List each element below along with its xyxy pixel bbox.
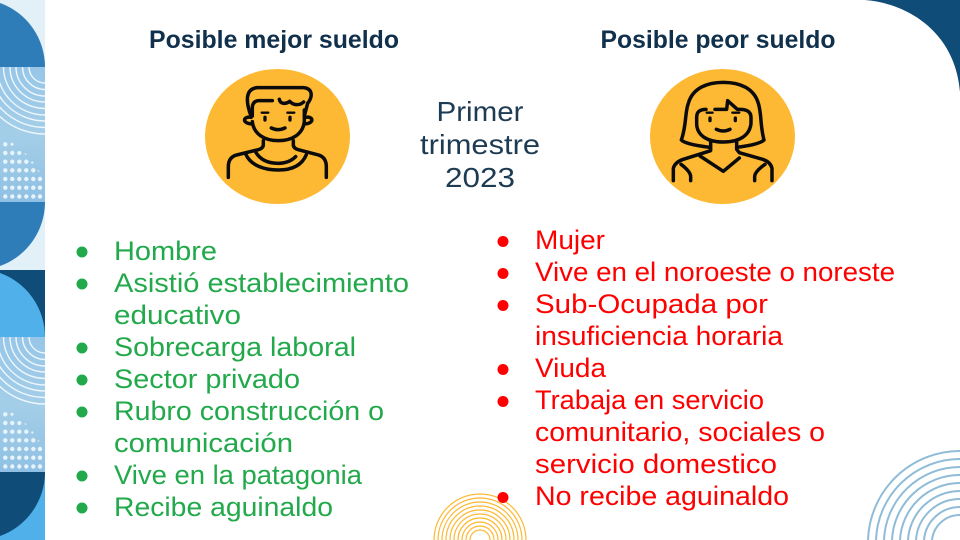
list: best salary traits: comunicación [114,428,293,458]
list: best salary traits: Sobrecarga laboral [114,332,356,362]
center title: period: 2023 [445,162,515,193]
panel: left decorative strip [0,0,112,540]
list: worst salary traits: Mujer [535,225,605,255]
list: best salary traits: Vive en la patagonia [114,460,363,490]
list: best salary traits: Sector privado [114,364,300,394]
list: worst salary traits: Vive en el noroeste o noreste [535,257,895,287]
center title: period: trimestre [420,129,540,160]
list: worst salary traits: Trabaja en servicio [535,385,764,415]
icon: woman avatar [650,69,795,204]
center title: period: Primer [436,96,524,127]
decorative corner: top right navy arc [865,0,960,92]
list: worst salary traits: comunitario, sociales o [535,417,825,447]
center title: period [420,96,540,193]
list: best salary traits: Rubro construcción o [114,396,384,426]
list: best salary traits [76,236,409,522]
decorative rings: bottom center [434,494,526,540]
list: worst salary traits: servicio domestico [535,449,777,479]
list: worst salary traits: No recibe aguinaldo [535,481,789,511]
list: best salary traits: Hombre [114,236,217,266]
decorative rings: bottom right [868,451,960,540]
icon: man avatar [205,69,350,204]
list: worst salary traits [498,225,895,511]
list: best salary traits: Recibe aguinaldo [114,492,333,522]
list: worst salary traits: Viuda [535,353,607,383]
heading: best salary: Posible mejor sueldo [149,26,399,54]
list: worst salary traits: insuficiencia horaria [535,321,784,351]
list: best salary traits: educativo [114,300,241,330]
heading: worst salary: Posible peor sueldo [600,26,836,54]
list: best salary traits: Asistió establecimiento [114,268,409,298]
list: worst salary traits: Sub-Ocupada por [535,289,768,319]
